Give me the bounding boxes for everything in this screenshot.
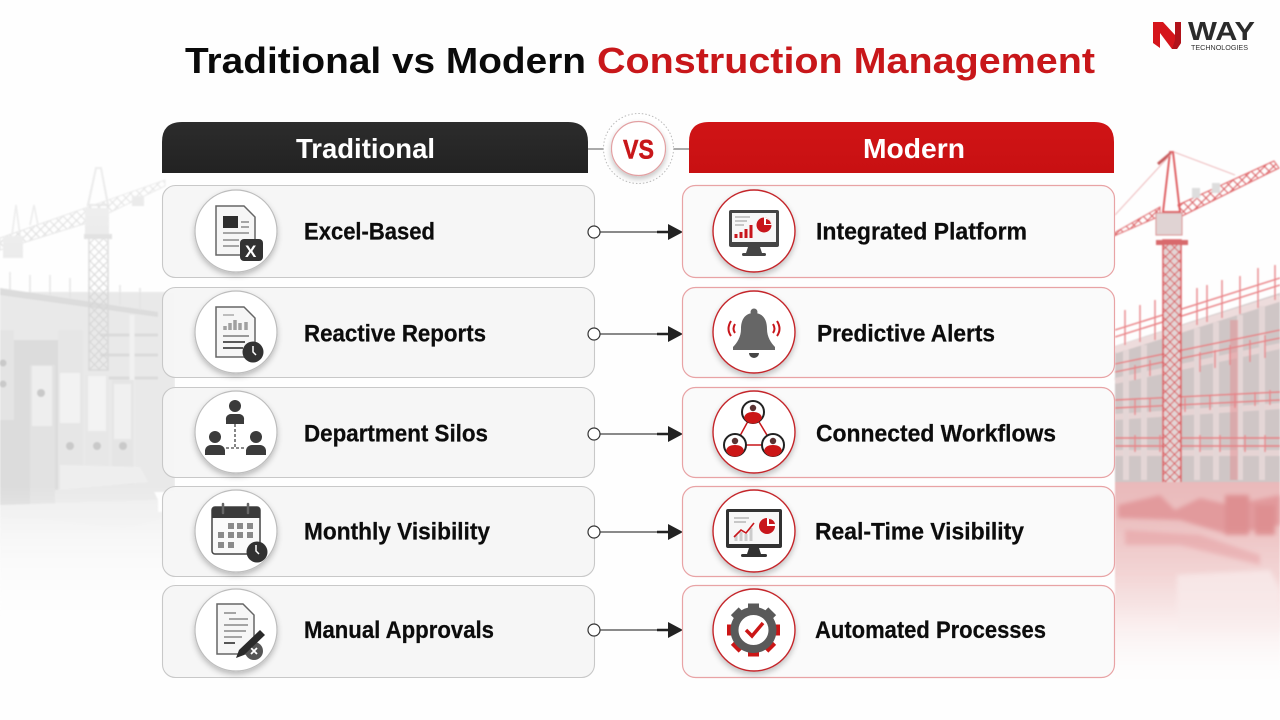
panel: Integrated Platform row	[682, 186, 1114, 278]
title: Construction Management	[597, 40, 1095, 81]
icon: connected people network	[724, 401, 784, 457]
panel: Integrated Platform row: Integrated Platform	[816, 218, 1027, 246]
grey binders	[0, 340, 134, 506]
panel: Manual Approvals row	[162, 586, 594, 678]
icon: separated people	[205, 400, 266, 455]
panel: Connected Workflows row: Connected Workflows	[816, 420, 1056, 448]
panel: Department Silos row	[162, 388, 594, 478]
icon: spreadsheet document with x	[216, 206, 263, 261]
arrow: Manual Approvals to Automated Processes	[588, 622, 683, 638]
arrow: Department Silos to Connected Workflows	[588, 426, 683, 442]
header: Modern	[689, 122, 1114, 173]
grey concrete slabs	[0, 468, 162, 530]
icon: document with pen	[217, 604, 265, 660]
grey building	[0, 272, 175, 492]
panel: Real-Time Visibility row: Real-Time Visibility	[815, 518, 1025, 546]
logo: NWAY Technologies	[1153, 16, 1255, 52]
panel: Automated Processes row: Automated Processes	[815, 617, 1046, 644]
panel: Excel-Based row	[162, 186, 594, 278]
header: Traditional: Traditional	[296, 133, 435, 164]
VS badge	[588, 114, 689, 184]
logo: NWAY Technologies: WAY	[1188, 16, 1255, 46]
arrow: Excel-Based to Integrated Platform	[588, 224, 683, 240]
panel: Excel-Based row: Excel-Based	[304, 218, 435, 246]
red rubble	[1114, 481, 1280, 642]
panel: Department Silos row: Department Silos	[304, 420, 488, 448]
logo: NWAY Technologies: TECHNOLOGIES	[1191, 43, 1248, 52]
icon: alert bell	[728, 308, 780, 358]
icon: calendar with clock	[212, 504, 268, 562]
title: Traditional vs Modern	[185, 40, 586, 81]
panel: Real-Time Visibility row	[682, 486, 1114, 576]
header: Modern: Modern	[863, 133, 965, 164]
panel: Reactive Reports row: Reactive Reports	[304, 320, 486, 348]
panel: Predictive Alerts row	[682, 288, 1114, 378]
panel: Monthly Visibility row: Monthly Visibility	[304, 518, 491, 546]
red building	[1115, 265, 1280, 500]
grey crane	[0, 168, 165, 370]
icon: monitor with live chart	[726, 509, 782, 557]
arrow: Reactive Reports to Predictive Alerts	[588, 326, 683, 342]
background: grey construction site with binders	[0, 167, 175, 530]
icon: spreadsheet document with x: X	[245, 242, 257, 261]
title	[185, 40, 1095, 81]
panel: Monthly Visibility row	[162, 486, 594, 576]
header: Traditional	[162, 122, 588, 173]
red crane	[1114, 152, 1279, 487]
background: red construction building and crane	[1114, 152, 1280, 692]
icon: gear with check	[727, 604, 780, 656]
panel: Predictive Alerts row: Predictive Alerts	[817, 320, 995, 348]
icon: report document with clock	[216, 307, 264, 362]
panel: Reactive Reports row	[162, 288, 594, 378]
VS badge: VS	[623, 134, 654, 164]
arrow: Monthly Visibility to Real-Time Visibility	[588, 524, 683, 540]
icon: red N mark	[1153, 22, 1181, 49]
icon: monitor with dashboard	[729, 210, 779, 256]
panel: Manual Approvals row: Manual Approvals	[304, 617, 494, 644]
panel: Automated Processes row	[682, 586, 1114, 678]
panel: Connected Workflows row	[682, 388, 1114, 478]
